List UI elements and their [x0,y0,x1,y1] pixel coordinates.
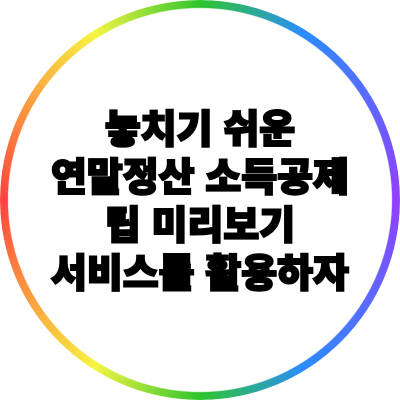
title line 2: 연말정산 소득공제 [51,157,349,200]
title line 3: 팁 미리보기 [105,205,295,248]
title line 4: 서비스를 활용하자 [51,253,349,296]
title line 1: 놓치기 쉬운 [105,109,295,152]
